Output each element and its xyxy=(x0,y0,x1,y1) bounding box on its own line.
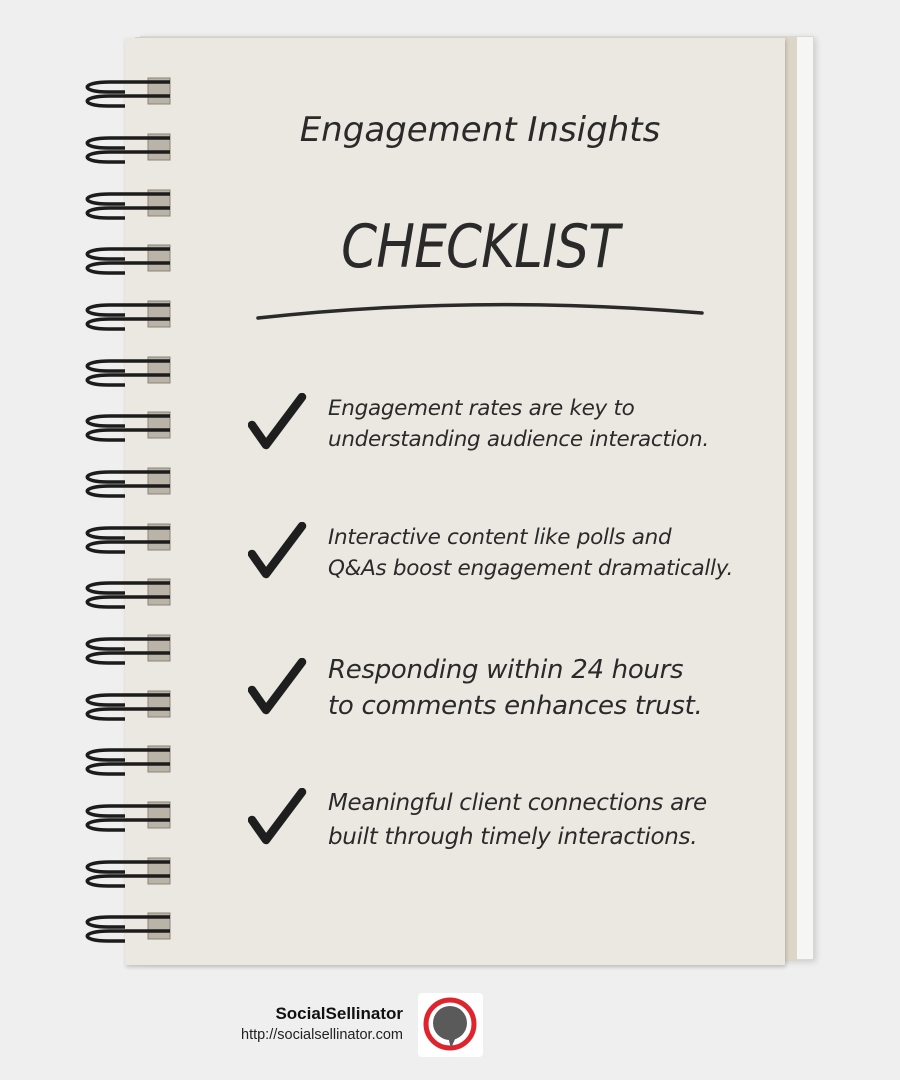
spiral binding xyxy=(86,78,170,943)
icon: check xyxy=(248,658,306,714)
notebook back pages xyxy=(140,36,814,960)
icon: check xyxy=(248,788,306,844)
item 1 xyxy=(248,393,709,452)
item 3: Responding within 24 hours xyxy=(328,655,683,685)
underline xyxy=(256,302,704,320)
item 1: understanding audience interaction. xyxy=(328,427,709,452)
item 2 xyxy=(248,522,733,581)
icon: check xyxy=(248,393,306,450)
item 4 xyxy=(248,788,707,850)
item 2: Q&As boost engagement dramatically. xyxy=(328,556,733,581)
item 3 xyxy=(248,655,702,721)
icon: check xyxy=(248,522,306,578)
item 4: built through timely interactions. xyxy=(328,824,697,850)
footer brand xyxy=(241,1004,403,1043)
footer brand: http://socialsellinator.com xyxy=(241,1027,403,1043)
title: Engagement Insights xyxy=(300,110,660,150)
icon: logo xyxy=(418,993,483,1057)
footer brand: SocialSellinator xyxy=(275,1004,403,1023)
item 3: to comments enhances trust. xyxy=(328,691,702,721)
item 4: Meaningful client connections are xyxy=(328,790,707,816)
item 2: Interactive content like polls and xyxy=(328,525,671,550)
heading: checklist: CHECKLIST xyxy=(341,212,619,282)
item 1: Engagement rates are key to xyxy=(328,396,634,421)
notebook page xyxy=(125,38,785,965)
